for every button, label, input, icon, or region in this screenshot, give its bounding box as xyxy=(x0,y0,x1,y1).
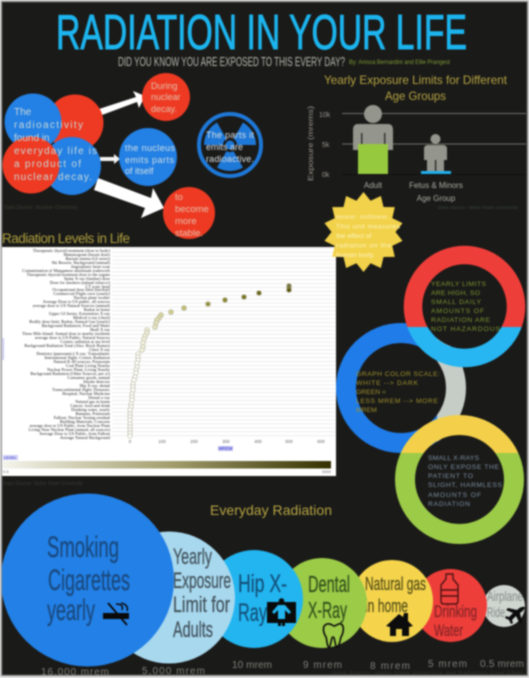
row labels: Background Radiation; Food and Water xyxy=(42,323,111,328)
ring: small x-rays: RADIATION xyxy=(428,501,470,508)
icon: adult figure with bar xyxy=(353,105,393,174)
ring: small x-rays: SMALL X-RAYS xyxy=(428,455,479,462)
icon: fetus and minors figure with bar xyxy=(421,134,451,174)
icon: radiation symbol ring xyxy=(199,114,261,176)
row labels: Smoke detector xyxy=(83,379,111,384)
x axis ticks: 200 xyxy=(190,439,198,444)
icon: airplane xyxy=(505,607,525,624)
circle: drinking water: Water xyxy=(434,621,463,640)
x axis labels: Adult xyxy=(364,181,383,190)
ring: yearly limits: YEARLY LIMITS xyxy=(431,281,486,288)
y axis highlight xyxy=(2,338,4,360)
row labels: Average Natural Background xyxy=(60,435,111,440)
circle: to become more stable: more xyxy=(175,216,197,227)
row labels: Background Radiation Total (Also: Brick Homes) xyxy=(24,343,111,348)
color legend: 0.5 xyxy=(3,469,9,474)
icon: tooth xyxy=(323,624,343,647)
arrow: to nucleus emits xyxy=(100,154,120,164)
ring: yearly limits: SMALL DAILY xyxy=(431,299,481,306)
ring: yearly limits: RADIATION ARE xyxy=(431,317,490,324)
circle: smoking cigarettes yearly xyxy=(1,494,174,666)
circle: nucleus emits parts: of itself xyxy=(125,166,154,176)
row labels: Radon in home xyxy=(84,307,110,312)
icon: x-ray xyxy=(267,598,296,626)
circle: during nuclear decay: During xyxy=(151,81,178,91)
data source: nuclear chemistry: Data Source: Nuclear Chemistry xyxy=(4,205,78,211)
row labels: Mammogram (breast dose) xyxy=(63,252,111,257)
text: radioactivity intro: a product of xyxy=(14,159,81,170)
circle: nucleus emits parts xyxy=(119,128,177,186)
x axis ticks: 300 xyxy=(222,439,230,444)
x axis ticks: 0 xyxy=(129,439,132,444)
text: radioactivity intro: found in xyxy=(14,133,50,144)
icon: no smoking xyxy=(103,603,129,625)
row labels: Transcontinental flight; Domestic xyxy=(52,387,110,392)
callout: mrem definition star: This unit measures xyxy=(336,224,401,230)
circle: during nuclear decay: decay. xyxy=(151,104,177,114)
circle: yearly exposure limit for adults xyxy=(103,532,235,664)
row labels: average dose to US Natural Sources (annual) xyxy=(33,303,111,308)
decay cluster circles xyxy=(2,94,104,195)
row labels: Therapeutic thyroid treatment dose to the organs xyxy=(27,272,110,277)
circle: natural gas in home: in home xyxy=(365,596,408,616)
x axis ticks: 500 xyxy=(285,439,293,444)
row labels: Three Mile Island: Annual dose to nearby residents xyxy=(22,331,110,336)
x axis labels: Age Group xyxy=(417,194,456,203)
row labels: Average Dose to US public, all sources xyxy=(43,299,110,305)
icon: radiation symbol ring: The parts it xyxy=(206,130,254,140)
row labels: Natural K-40 sources; Potassium xyxy=(53,359,111,364)
color legend: 5000 xyxy=(322,469,332,474)
ring: small x-rays: SLIGHT, HARMLESS xyxy=(428,482,502,489)
row labels: Cosmic radiation at sea level xyxy=(60,339,111,344)
circle: natural gas in home xyxy=(351,560,433,642)
circle: smoking cigarettes yearly: yearly xyxy=(47,594,95,627)
row labels: Bodily dose limit; Radon, Natural Gas (yearly) xyxy=(29,319,111,325)
values: mrem labels: 5,000 mrem xyxy=(142,666,205,677)
data source: Data source: Idaho State University xyxy=(438,205,519,210)
row labels: International flight; Cosmic Radiation xyxy=(44,355,111,360)
heading: everyday radiation: Everyday Radiation xyxy=(210,502,332,518)
row labels: CT scan: head xyxy=(85,284,111,289)
text: radioactivity intro: radioactivity xyxy=(14,120,83,131)
panel: radiation levels chart xyxy=(2,247,336,476)
circle: to become more stable: to xyxy=(175,192,183,203)
text: radioactivity intro: The xyxy=(14,107,32,118)
ring: graph color scale: GREEN = xyxy=(356,389,386,396)
ring: yearly limits xyxy=(413,255,516,358)
icon: house xyxy=(386,613,413,636)
circle: dental x-ray: Dental xyxy=(308,571,350,597)
circle: to become more stable: stable. xyxy=(175,228,203,239)
circle: hip x-ray xyxy=(205,550,303,648)
text: radioactivity intro: nuclear decay. xyxy=(14,172,92,183)
x axis labels: Fetus & Minors xyxy=(409,181,463,190)
x axis labels xyxy=(364,181,463,203)
circle: yearly exposure limit for adults: Yearly xyxy=(173,544,212,569)
circle: smoking cigarettes yearly: Smoking xyxy=(47,531,119,564)
y axis labels: Exposure (mrems) xyxy=(306,106,315,181)
circle: yearly exposure limit for adults: Adults xyxy=(173,617,213,642)
row labels: Occupational dose limit (nuclear) xyxy=(52,287,111,292)
icon: bottle xyxy=(441,574,458,604)
circle: dental x-ray xyxy=(277,558,367,648)
row labels: Hospital; Nuclear Medicine xyxy=(62,391,110,396)
values: mrem labels: 0.5 mrem xyxy=(480,659,524,670)
row labels: Barium enema (GI series) xyxy=(65,256,111,261)
panel: nuclear decay diagram xyxy=(2,73,261,239)
ring: yearly limits: ARE HIGH, SO xyxy=(431,290,480,297)
row labels: Background Radiation (Other Sources; per yr) xyxy=(30,371,111,376)
row labels: Bananas; Potassium xyxy=(76,411,111,416)
circle: nucleus emits parts: emits parts xyxy=(125,155,174,165)
heading: radiation levels: Radiation Levels in Life xyxy=(2,231,130,246)
byline: By: Anissa Bernardini and Ellie Prangest xyxy=(349,59,450,66)
row labels: Nuclear plant worker xyxy=(73,295,111,300)
x axis ticks: 600 xyxy=(317,439,325,444)
text: radioactivity intro xyxy=(14,107,97,183)
circle: hip x-ray: Ray xyxy=(238,599,267,627)
arrow: to become stable xyxy=(94,178,164,218)
color legend xyxy=(3,455,332,474)
text: radioactivity intro: everyday life is xyxy=(14,146,97,157)
row labels: Average Dose to US Public, from Fallout xyxy=(39,431,111,437)
ring: graph color scale: LESS MREM --> MORE xyxy=(356,398,438,405)
ring: graph color scale: GRAPH COLOR SCALE: xyxy=(356,371,440,378)
circle: airplane ride xyxy=(483,585,525,627)
values: mrem labels: 9 mrem xyxy=(303,660,342,671)
row labels: Dose for smokers (annual tobacco) xyxy=(50,280,111,285)
callout: mrem definition star: mrem: millirem. xyxy=(336,214,389,221)
circle: dental x-ray: X-Ray xyxy=(308,597,347,623)
row labels: Skull X-ray xyxy=(90,327,111,332)
row labels: Consumer goods, annual xyxy=(67,375,111,381)
callout: mrem definition star: the effect of xyxy=(336,233,372,240)
y axis labels: 0k xyxy=(322,172,330,179)
row labels: Contamination of Manganese aluminum tradework xyxy=(22,268,111,273)
circle: natural gas in home: Natural gas xyxy=(365,574,426,594)
ring: small x-rays: PATIENT TO xyxy=(428,473,473,480)
circle: yearly exposure limit for adults: Limit for xyxy=(173,592,230,617)
callout: mrem definition star: radiation on the xyxy=(336,242,391,250)
circle: during nuclear decay: nuclear xyxy=(151,92,181,102)
row labels: average dose to US Public; Natural Sources xyxy=(35,335,110,340)
row labels: Fallout; Nuclear Testing residual xyxy=(54,415,111,420)
ring: graph color scale: MREM xyxy=(356,407,377,414)
subtitle: DID YOU KNOW YOU ARE EXPOSED TO THIS EVERY DAY? xyxy=(118,55,345,69)
values: mrem labels xyxy=(41,659,524,678)
circle: to become more stable xyxy=(163,187,215,239)
panel: yearly exposure limits chart xyxy=(306,73,526,210)
row labels: Angioplasty heart scan xyxy=(71,264,111,269)
circle: airplane ride: Ride xyxy=(487,604,505,620)
x axis ticks xyxy=(129,439,325,444)
ring: graph color scale: WHITE --> DARK xyxy=(356,380,418,387)
values: mrem labels: 10 mrem xyxy=(232,660,272,671)
circle: smoking cigarettes yearly: Cigarettes xyxy=(48,564,130,597)
row labels: Drinking water, yearly xyxy=(71,407,111,413)
row labels: Natural gas in home xyxy=(75,399,110,404)
circle: nucleus emits parts: the nucleus xyxy=(125,143,176,153)
circle: hip x-ray: Hip X- xyxy=(238,570,287,598)
scatter points xyxy=(128,284,291,438)
circle: drinking water xyxy=(414,569,487,642)
data source: bottom: Data Source: Idaho State University and Radiation Dose Chart xyxy=(333,670,524,675)
circle: drinking water: Drinking xyxy=(434,602,477,621)
row labels: Living Near Nuclear Plant (annual; all sources) xyxy=(29,427,111,432)
chart heading: Age Groups xyxy=(385,89,446,103)
x axis ticks: 100 xyxy=(158,439,166,444)
row labels: Nuclear Power Plant; Living Nearby xyxy=(47,367,111,372)
row labels: Ski Resorts: Background (annual) xyxy=(52,260,111,265)
row labels: Coal Plant Living Nearby xyxy=(66,363,111,368)
circle: during nuclear decay xyxy=(142,73,190,121)
row labels: Building Materials; Concrete xyxy=(60,419,110,424)
row labels xyxy=(22,248,111,440)
callout: mrem definition star xyxy=(324,192,402,272)
values: mrem labels: 16,000 mrem xyxy=(41,667,109,678)
ring: small x-rays xyxy=(405,425,514,534)
row labels: Therapeutic thyroid treatment (dose to body) xyxy=(33,248,111,253)
row labels: Spine X-ray (lumbar) dose xyxy=(64,276,110,281)
values: mrem labels: 5 mrem xyxy=(428,659,467,670)
row labels: Cancer; food and drink xyxy=(70,403,111,408)
row labels: Dentistry (panoramic) X-ray; Transatlantic xyxy=(36,351,110,356)
y axis labels: 10k xyxy=(319,112,331,119)
axis title: mrem: MREM xyxy=(219,446,233,451)
y axis labels xyxy=(306,106,331,181)
row labels: Dental x-ray xyxy=(88,395,111,400)
row labels: Chest X-ray xyxy=(89,347,111,352)
row labels: average dose to US Public, from Nuclear Plant xyxy=(30,423,111,429)
ring: graph color scale xyxy=(346,333,456,443)
ring: small x-rays: AMOUNTS OF xyxy=(428,492,481,499)
row labels: Upper GI Series; Extremities X-ray xyxy=(49,311,111,316)
circle: to become more stable: become xyxy=(175,204,209,215)
circle: yearly exposure limit for adults: Exposure xyxy=(173,568,231,593)
x axis ticks: 400 xyxy=(254,439,262,444)
row labels: Medical x-ray (chest) xyxy=(73,315,111,320)
icon: radiation symbol ring: radioactive. xyxy=(206,154,254,164)
color legend: LEVEL xyxy=(4,455,17,460)
chart heading: Yearly Exposure Limits for Different xyxy=(324,73,508,87)
callout: mrem definition star: human body. xyxy=(336,252,375,259)
data source: idaho: Data Source: Idaho State University xyxy=(3,481,84,487)
ring: yearly limits: AMOUNTS OF xyxy=(431,308,484,315)
icon: radiation symbol ring: emits are xyxy=(206,142,243,152)
ring: yearly limits: NOT HAZARDOUS xyxy=(431,326,500,333)
ring: small x-rays: ONLY EXPOSE THE xyxy=(428,464,499,471)
y axis labels: 5k xyxy=(322,142,330,149)
row labels: Hip X-ray; dental xyxy=(80,383,111,388)
values: mrem labels: 8 mrem xyxy=(370,661,410,672)
row labels: Commercial Flight crew (yearly) xyxy=(53,291,111,296)
arrow: to nuclear decay xyxy=(99,91,145,115)
